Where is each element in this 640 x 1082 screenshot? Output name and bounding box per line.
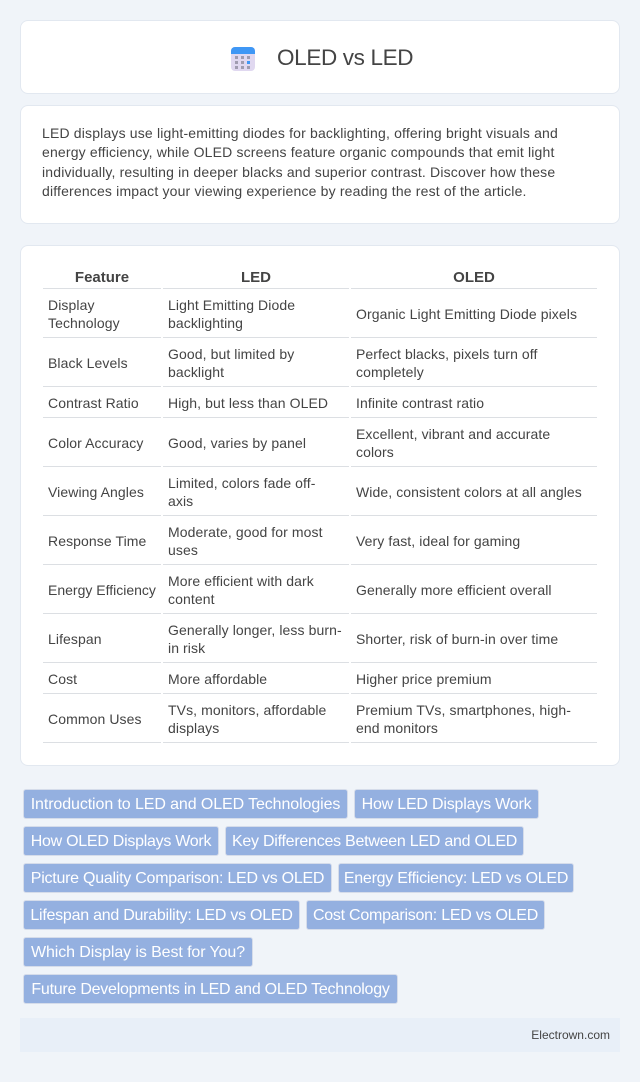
intro text: energy efficiency, while OLED screens feature organic compounds that emit light [42, 144, 555, 160]
comparison table: backlighting [168, 315, 243, 331]
comparison table: Very fast, ideal for gaming [356, 533, 520, 549]
comparison table: Moderate, good for most [168, 524, 323, 540]
tag: future developments [23, 974, 398, 1004]
tag: picture quality: Picture Quality Comparison: LED vs OLED [31, 870, 324, 887]
footer [20, 1018, 620, 1052]
comparison table: Common Uses [48, 711, 142, 727]
tag: introduction [23, 789, 348, 819]
tag: which display: Which Display is Best for You? [31, 944, 245, 961]
panel: comparison table [20, 245, 620, 766]
intro text [42, 125, 558, 199]
icon: calendar [231, 47, 255, 71]
comparison table: end monitors [356, 720, 438, 736]
comparison table: in risk [168, 640, 205, 656]
panel: introduction [20, 105, 620, 224]
comparison table: content [168, 591, 215, 607]
tag: how OLED works [23, 826, 219, 856]
title: OLED vs LED [277, 45, 413, 70]
comparison table: OLED [453, 268, 495, 286]
comparison table: Viewing Angles [48, 484, 144, 500]
comparison table: Light Emitting Diode [168, 297, 295, 313]
comparison table: Good, varies by panel [168, 435, 306, 451]
panel: topic links [23, 789, 574, 1004]
comparison table: Shorter, risk of burn-in over time [356, 631, 558, 647]
tag: picture quality [23, 863, 332, 893]
comparison table: High, but less than OLED [168, 395, 328, 411]
comparison table: Generally more efficient overall [356, 582, 552, 598]
tag: lifespan [23, 900, 300, 930]
comparison table: Response Time [48, 533, 146, 549]
comparison table: Display [48, 297, 95, 313]
comparison table: backlight [168, 364, 224, 380]
comparison table: Feature [75, 268, 129, 286]
tag: how OLED works: How OLED Displays Work [31, 833, 211, 850]
intro text: individually, resulting in deeper blacks and superior contrast. Discover how these [42, 164, 555, 180]
comparison table: completely [356, 364, 424, 380]
tag: energy efficiency: Energy Efficiency: LED vs OLED [344, 870, 568, 887]
comparison table: LED [241, 268, 271, 286]
tag: key differences [225, 826, 524, 856]
tag: lifespan: Lifespan and Durability: LED vs OLED [30, 907, 293, 924]
comparison table: Good, but limited by [168, 346, 294, 362]
tag: future developments: Future Developments in LED and OLED Technology [31, 981, 390, 998]
tag: cost [306, 900, 545, 930]
comparison table: Black Levels [48, 355, 128, 371]
comparison table: Excellent, vibrant and accurate [356, 426, 550, 442]
comparison table: Energy Efficiency [48, 582, 156, 598]
tag: which display [23, 937, 253, 967]
comparison table: uses [168, 542, 198, 558]
tag: cost: Cost Comparison: LED vs OLED [313, 907, 538, 924]
comparison table: Wide, consistent colors at all angles [356, 484, 582, 500]
comparison table: Cost [48, 671, 77, 687]
tag: how LED works: How LED Displays Work [362, 796, 531, 813]
comparison table: Premium TVs, smartphones, high- [356, 702, 571, 718]
comparison table: Higher price premium [356, 671, 492, 687]
panel: header [20, 20, 620, 94]
comparison table: Color Accuracy [48, 435, 143, 451]
comparison table: axis [168, 493, 193, 509]
tag: introduction: Introduction to LED and OLED Technologies [31, 796, 340, 813]
footer credit: Electrown.com [531, 1028, 610, 1042]
intro text: differences impact your viewing experience by reading the rest of the article. [42, 183, 527, 199]
comparison table: colors [356, 444, 394, 460]
comparison table: Limited, colors fade off- [168, 475, 316, 491]
tag: key differences: Key Differences Between LED and OLED [232, 833, 517, 850]
comparison table: Perfect blacks, pixels turn off [356, 346, 538, 362]
tag: energy efficiency [338, 863, 574, 893]
comparison table: More affordable [168, 671, 267, 687]
comparison table: Generally longer, less burn- [168, 622, 342, 638]
comparison table [43, 268, 597, 743]
comparison table: TVs, monitors, affordable [168, 702, 326, 718]
comparison table: Lifespan [48, 631, 102, 647]
tag: how LED works [354, 789, 539, 819]
comparison table: Contrast Ratio [48, 395, 139, 411]
comparison table: Organic Light Emitting Diode pixels [356, 306, 577, 322]
comparison table: Technology [48, 315, 120, 331]
comparison table: displays [168, 720, 219, 736]
comparison table: Infinite contrast ratio [356, 395, 484, 411]
intro text: LED displays use light-emitting diodes for backlighting, offering bright visuals and [42, 125, 558, 141]
comparison table: More efficient with dark [168, 573, 314, 589]
